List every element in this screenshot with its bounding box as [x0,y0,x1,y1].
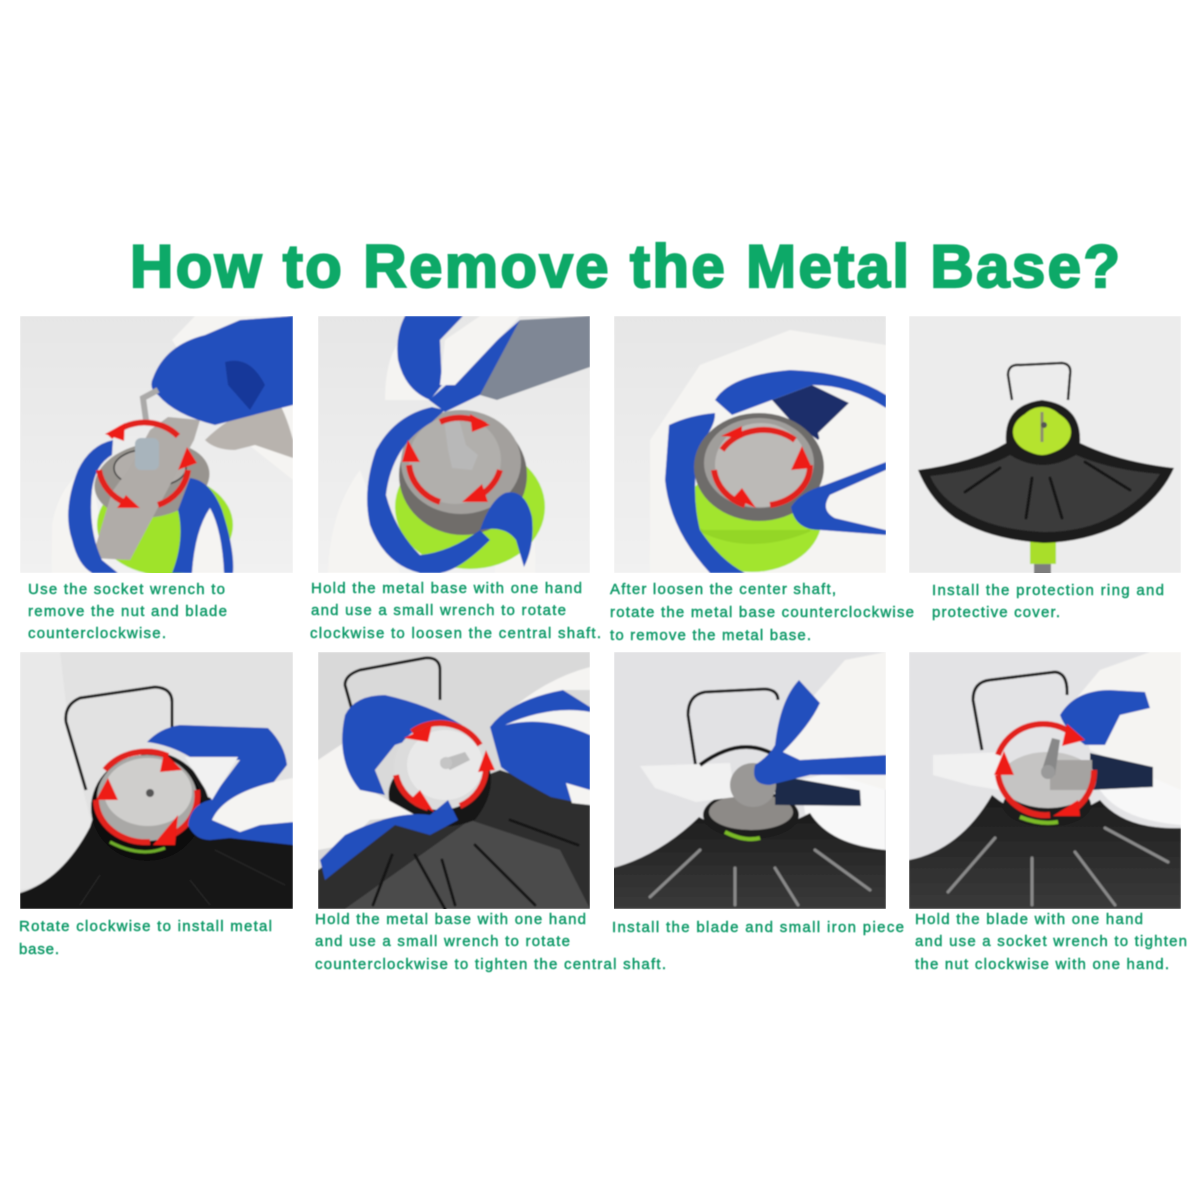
panel: step 2 caption: Hold the metal base with one hand [311,580,582,597]
panel: step 3 caption: After loosen the center shaft, [610,581,836,598]
panel: step 8 photo [909,652,1181,909]
panel: step 6 caption [315,911,666,973]
panel: step 7 photo [613,652,886,909]
panel: step 4 caption: protective cover. [932,604,1060,621]
panel: step 1 caption: counterclockwise. [28,625,166,642]
panel: step 7 caption: Install the blade and small iron piece [612,919,904,936]
panel: step 5 caption: base. [19,941,59,958]
panel: step 2 caption: clockwise to loosen the central shaft. [310,625,601,642]
title: How to Remove the Metal Base? [130,233,1120,300]
panel: step 6 caption: and use a small wrench to rotate [315,933,570,950]
panel: step 3 photo [614,316,886,573]
panel: step 2 photo [318,316,590,573]
panel: step 3 caption: rotate the metal base counterclockwise [610,604,914,621]
panel: step 8 caption [915,911,1187,973]
panel: step 3 caption [610,581,914,644]
panel: step 4 caption [932,582,1164,621]
panel: step 8 caption: and use a socket wrench to tighten [915,933,1187,950]
panel: step 1 caption: remove the nut and blade [28,603,227,620]
panel: step 8 caption: Hold the blade with one hand [915,911,1143,928]
panel: step 1 photo [20,316,293,575]
panel: step 6 photo [318,652,590,909]
panel: step 1 caption [28,581,227,642]
panel: step 5 caption [19,918,272,958]
panel: step 5 caption: Rotate clockwise to install metal [19,918,272,935]
panel: step 1 caption: Use the socket wrench to [28,581,225,598]
panel: step 6 caption: Hold the metal base with one hand [315,911,586,928]
panel: step 8 caption: the nut clockwise with one hand. [915,956,1169,973]
panel: step 5 photo [20,652,293,909]
panel: step 4 photo [909,316,1181,575]
panel: step 6 caption: counterclockwise to tighten the central shaft. [315,956,666,973]
panel: step 2 caption [310,580,601,642]
panel: step 4 caption: Install the protection ring and [932,582,1164,599]
panel: step 3 caption: to remove the metal base. [610,627,811,644]
panel: step 2 caption: and use a small wrench to rotate [311,602,566,619]
